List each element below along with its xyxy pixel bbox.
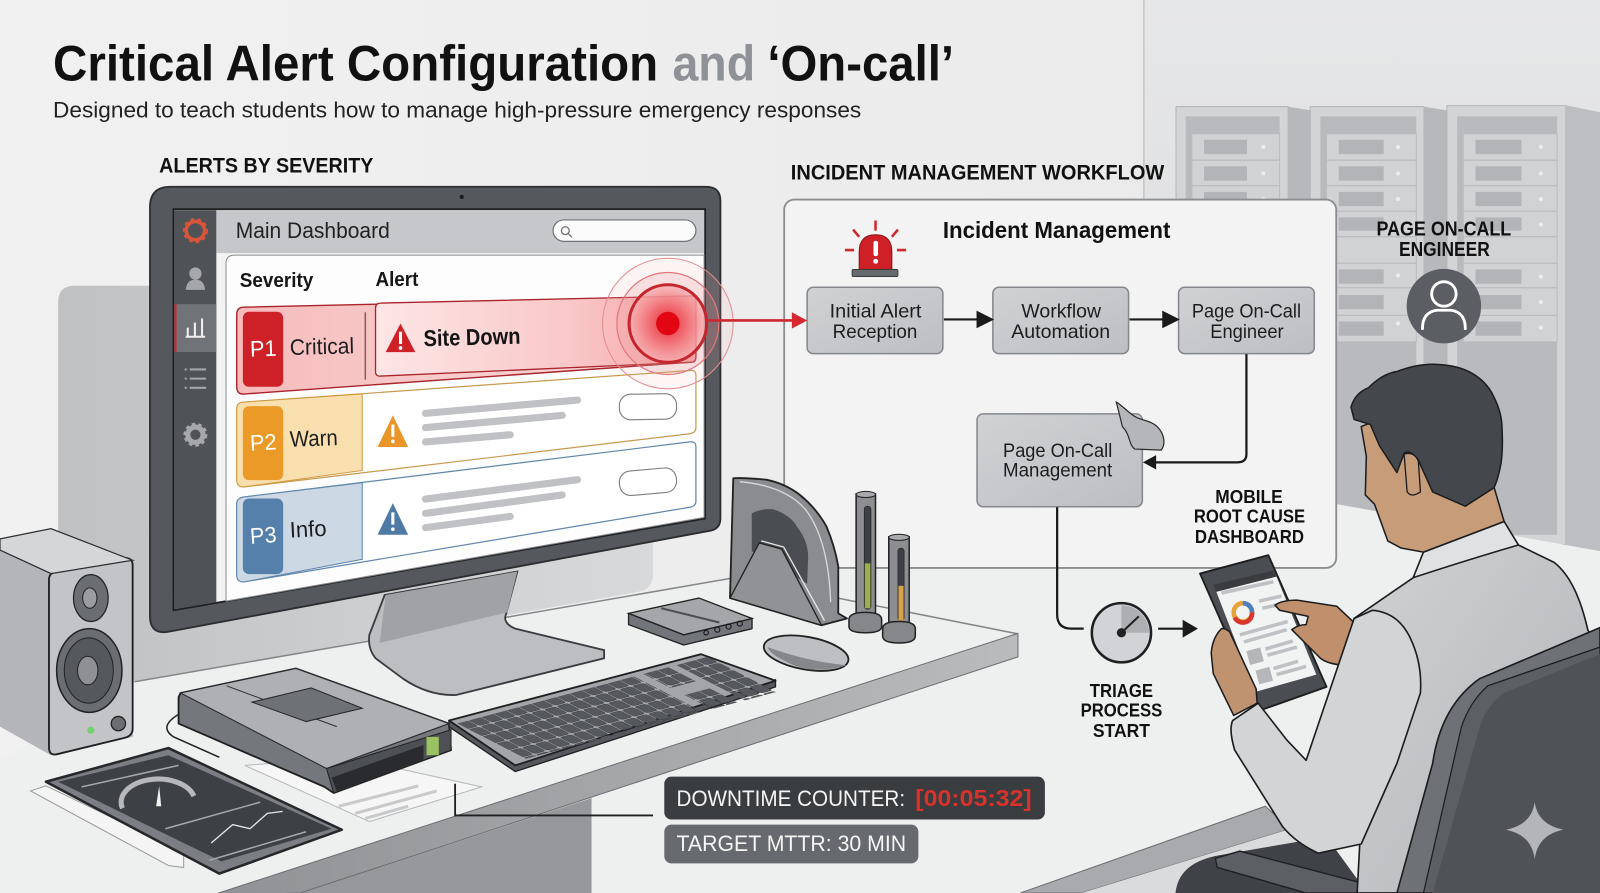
row: P3 info: P3: [249, 522, 277, 549]
dashboard title: Main Dashboard: [236, 218, 390, 243]
heading: alerts by severity: ALERTS BY SEVERITY: [159, 154, 374, 177]
panel heading: Incident Management: [943, 217, 1171, 243]
panel: incident management: [784, 200, 1336, 568]
arrow: alert to automation: [944, 312, 992, 327]
monitor bezel: [150, 187, 720, 632]
page on-call engineer label: ENGINEER: [1399, 239, 1490, 261]
downtime counter: DOWNTIME COUNTER:: [677, 786, 905, 811]
ear: [1404, 453, 1420, 495]
speaker: [0, 529, 133, 755]
triage label: START: [1093, 720, 1150, 741]
row: P3 info: Info: [289, 516, 327, 543]
mobile root cause label: ROOT CAUSE: [1194, 506, 1305, 527]
title: ‘On-call’: [767, 36, 954, 92]
keyboard: [449, 654, 777, 772]
engineer at phone: [1176, 364, 1600, 893]
mini router: [629, 598, 752, 645]
armrest and seat: [1176, 837, 1367, 893]
step: workflow automation: [993, 287, 1129, 354]
icon: hand shape: [1116, 402, 1164, 450]
triage label: PROCESS: [1081, 699, 1162, 720]
sparkle watermark: [1506, 802, 1563, 859]
torso: [1354, 522, 1600, 893]
table headers: Severity: [240, 270, 314, 292]
floor and desk surface: [0, 504, 1600, 893]
head and neck: [1361, 408, 1504, 552]
console device: [167, 668, 451, 793]
step: initial alert reception: Initial Alert: [830, 300, 922, 322]
server racks: [1176, 105, 1600, 556]
step: workflow automation: Automation: [1011, 321, 1110, 343]
title: Critical Alert Configuration: [53, 36, 658, 92]
page on-call engineer label: [1377, 219, 1511, 261]
step: page on-call management: [977, 414, 1142, 507]
row: P1 critical: Critical: [289, 333, 354, 360]
icon: triage gauge: [1092, 603, 1151, 662]
desk back edges: [135, 578, 1017, 682]
row: P1 critical: [237, 296, 696, 394]
row: P2 warn: Warn: [289, 425, 338, 452]
back panel behind monitor: [58, 286, 653, 694]
step: initial alert reception: Reception: [833, 321, 917, 343]
mouse: [761, 630, 851, 677]
leader line: [455, 784, 653, 815]
red arrow to workflow: [706, 312, 807, 329]
arrow: triage to mobile: [1158, 622, 1196, 636]
target mttr: [664, 825, 918, 863]
right wall: [1144, 0, 1600, 572]
tablet on desk: [31, 748, 342, 874]
desk support post: [300, 798, 592, 893]
icon: sidebar chart: [186, 318, 205, 337]
monitor stand: [369, 572, 604, 695]
dashboard top bar: [216, 210, 704, 253]
icon: sidebar gear red: [184, 219, 207, 242]
page on-call engineer label: PAGE ON-CALL: [1377, 219, 1511, 241]
icon: siren: [845, 220, 906, 277]
active sidebar item: [174, 304, 216, 352]
monitor: [150, 187, 720, 632]
sidebar: [174, 210, 216, 609]
sleeve: [1231, 610, 1421, 853]
main desk front edge: [209, 633, 1018, 893]
collar: [1413, 522, 1518, 578]
icon: sidebar list: [185, 369, 206, 388]
table headers: Alert: [376, 269, 419, 291]
step: initial alert reception: [807, 287, 943, 354]
screen: [173, 209, 705, 610]
triage label: [1081, 680, 1162, 741]
step: page on-call engineer: [1179, 287, 1314, 354]
step: page on-call management: Page On-Call: [1003, 440, 1112, 462]
target mttr: TARGET MTTR: 30 MIN: [677, 831, 906, 856]
short indicator: [883, 534, 915, 643]
tall indicator: [849, 491, 882, 633]
alert table surface: [226, 255, 704, 601]
arrow: engineer to management: [1143, 354, 1246, 469]
hair: [1351, 364, 1502, 506]
webcam: [460, 195, 464, 199]
downtime counter: [664, 777, 1045, 820]
arch device: [730, 478, 847, 625]
row: P2 warn: [237, 370, 696, 487]
icon: engineer avatar: [1407, 269, 1481, 343]
table headers: [240, 269, 419, 292]
search box: [553, 220, 696, 241]
mobile root cause label: MOBILE: [1215, 486, 1283, 507]
row: P2 warn: P2: [249, 429, 277, 456]
icon: sidebar settings: [185, 424, 206, 445]
downtime counter: [00:05:32]: [915, 785, 1032, 811]
chair back: [1397, 628, 1600, 893]
arrow: automation to paging: [1130, 312, 1178, 327]
triage label: TRIAGE: [1090, 680, 1153, 701]
right desk front edge: [1020, 806, 1327, 893]
step: page on-call engineer: Engineer: [1210, 321, 1284, 343]
hand pointing: [1275, 600, 1355, 665]
step: page on-call engineer: Page On-Call: [1192, 300, 1301, 322]
hand holding phone: [1211, 628, 1257, 715]
step: workflow automation: Workflow: [1021, 300, 1102, 322]
mobile root cause label: [1194, 486, 1305, 547]
phone: [1200, 555, 1327, 710]
icon: sidebar user: [186, 267, 205, 290]
paper notes: [245, 757, 482, 822]
subtitle: Designed to teach students how to manage high-pressure emergency responses: [53, 97, 861, 122]
heading: workflow: INCIDENT MANAGEMENT WORKFLOW: [791, 161, 1165, 185]
row: P1 critical: P1: [250, 336, 277, 362]
connector: management to triage: [1057, 507, 1084, 629]
pulsing alert target: [603, 258, 733, 389]
mobile root cause label: DASHBOARD: [1195, 526, 1304, 547]
title: and: [672, 36, 755, 92]
site down alert: [376, 296, 696, 376]
row: P3 info: [237, 442, 696, 582]
site down alert: Site Down: [423, 323, 521, 351]
step: page on-call management: Management: [1003, 460, 1113, 482]
